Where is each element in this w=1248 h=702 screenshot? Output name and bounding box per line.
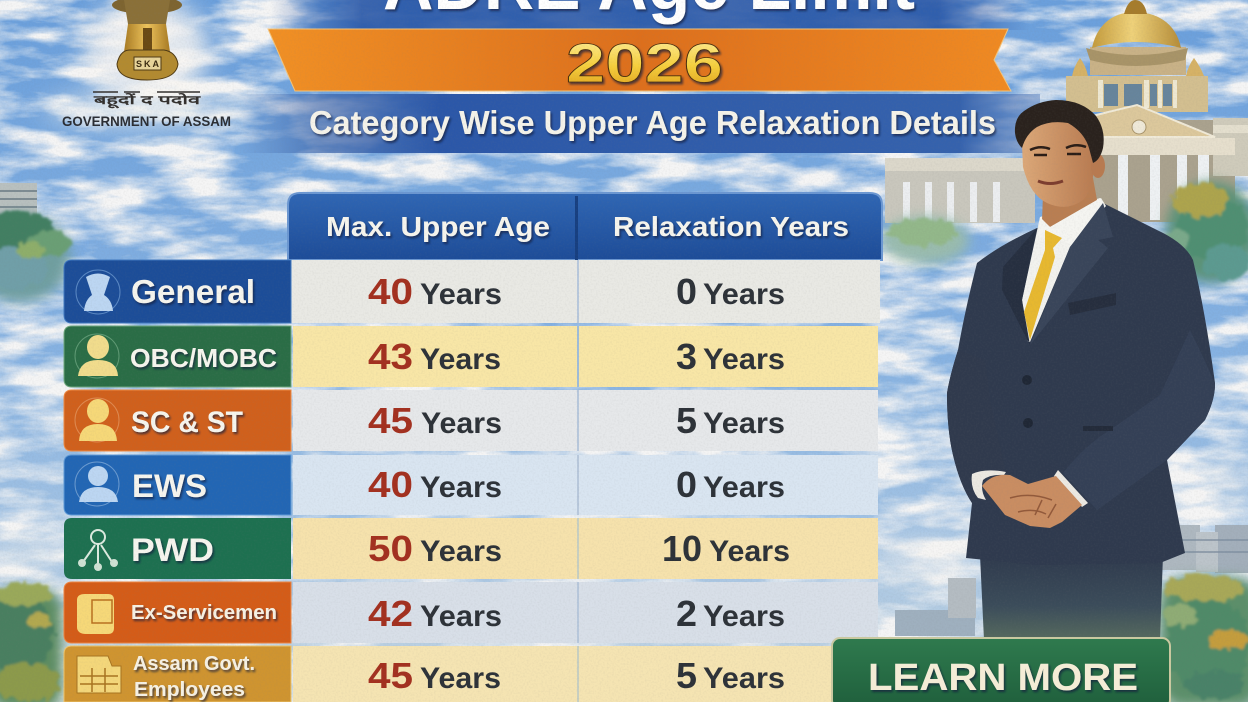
scenery: left tower bbox=[0, 183, 37, 218]
scenery: distant city buildings bbox=[895, 525, 1248, 636]
row: Assam Govt. Employees: Assam Govt. bbox=[133, 653, 255, 675]
trousers bbox=[980, 555, 1163, 640]
shirt bbox=[1022, 198, 1103, 342]
row: PWD: 50 bbox=[368, 528, 413, 569]
row: General bbox=[64, 260, 880, 323]
illustration: man in suit bbox=[947, 100, 1215, 640]
text: Government of Assam: GOVERNMENT OF ASSAM bbox=[62, 113, 231, 129]
row: Assam Govt. Employees: 5 bbox=[676, 655, 697, 696]
row: PWD: Years bbox=[420, 535, 502, 568]
row: Ex-Servicemen: 2 bbox=[676, 593, 697, 634]
panel: age table bbox=[64, 193, 882, 702]
row: EWS bbox=[64, 455, 878, 515]
lapels bbox=[1002, 228, 1037, 345]
row: SC & ST bbox=[64, 390, 878, 451]
icon: Assam emblem bbox=[112, 0, 182, 80]
title banner background bbox=[270, 0, 1030, 30]
row: PWD bbox=[64, 518, 878, 579]
scenery: left upper trees bbox=[0, 210, 72, 302]
shirt cuffs bbox=[972, 470, 1088, 507]
row: Assam Govt. Employees: 45 bbox=[368, 655, 413, 696]
row: Ex-Servicemen: Years bbox=[703, 600, 785, 633]
row: SC & ST: 5 bbox=[676, 400, 697, 441]
row: EWS: Years bbox=[703, 471, 785, 504]
ear bbox=[1091, 154, 1105, 178]
row: EWS: 0 bbox=[676, 464, 697, 505]
row: SC & ST: Years bbox=[703, 407, 785, 440]
row: Assam Govt. Employees: Employees bbox=[134, 679, 245, 701]
row: OBC/MOBC: OBC/MOBC bbox=[130, 343, 277, 373]
row: OBC/MOBC: Years bbox=[420, 343, 501, 376]
clasped hands bbox=[982, 475, 1082, 528]
row: General: Years bbox=[420, 278, 502, 311]
illustration: government building with golden dome bbox=[885, 0, 1248, 223]
breast pocket bbox=[1068, 293, 1116, 315]
row: OBC/MOBC: 3 bbox=[676, 336, 697, 377]
row: EWS: EWS bbox=[132, 468, 207, 504]
table header bbox=[288, 193, 882, 260]
emblem motto line bbox=[92, 92, 202, 109]
tie bbox=[1024, 230, 1062, 340]
face details bbox=[1030, 145, 1086, 150]
jacket buttons and pocket bbox=[1022, 375, 1113, 431]
row: Assam Govt. Employees: Years bbox=[703, 662, 785, 695]
emblem motto line: बहूदों द पदोव bbox=[92, 93, 202, 109]
hair bbox=[1015, 100, 1104, 163]
row: Ex-Servicemen: 42 bbox=[368, 593, 413, 634]
orange ribbon with year bbox=[268, 29, 1011, 94]
icon: Assam emblem: SKA bbox=[136, 59, 160, 69]
row: EWS: 40 bbox=[368, 464, 413, 505]
table header: Max. Upper Age bbox=[326, 211, 550, 242]
row: Ex-Servicemen bbox=[64, 582, 878, 643]
row: Ex-Servicemen: Years bbox=[420, 600, 502, 633]
row: SC & ST: 45 bbox=[368, 400, 413, 441]
row: PWD: Years bbox=[709, 535, 790, 568]
scenery: left lower trees bbox=[0, 582, 62, 702]
row: OBC/MOBC: 43 bbox=[368, 336, 413, 377]
row: Ex-Servicemen: Ex-Servicemen bbox=[131, 602, 277, 624]
button: learn more bbox=[832, 638, 1170, 702]
row: Assam Govt. Employees: Years bbox=[420, 662, 501, 695]
row: Assam Govt. Employees bbox=[64, 646, 878, 702]
subtitle: category wise details: Category Wise Upper Age Relaxation Details bbox=[309, 104, 996, 141]
row: OBC/MOBC: Years bbox=[703, 343, 785, 376]
year: 2026: 2026 bbox=[566, 32, 723, 94]
button: learn more: LEARN MORE bbox=[868, 657, 1138, 699]
row: PWD: 10 bbox=[662, 528, 702, 569]
head bbox=[1022, 120, 1095, 207]
collar bbox=[1038, 198, 1106, 245]
right sleeve bbox=[1063, 330, 1215, 510]
scenery: trees in front of the building bbox=[881, 182, 1248, 282]
subtitle band bbox=[240, 94, 1040, 153]
row: SC & ST: SC & ST bbox=[131, 406, 243, 439]
neck bbox=[1042, 178, 1097, 227]
row: General: Years bbox=[703, 278, 785, 311]
row: General: General bbox=[131, 273, 255, 310]
scenery: right lower trees bbox=[1160, 574, 1248, 702]
row: General: 40 bbox=[368, 271, 413, 312]
table header: Relaxation Years bbox=[613, 211, 849, 242]
left sleeve bbox=[947, 350, 1006, 503]
row: OBC/MOBC bbox=[64, 326, 878, 387]
row: General: 0 bbox=[676, 271, 697, 312]
row: SC & ST: Years bbox=[421, 407, 502, 440]
row: PWD: PWD bbox=[131, 532, 214, 568]
jacket bbox=[947, 203, 1215, 565]
row: EWS: Years bbox=[420, 471, 502, 504]
